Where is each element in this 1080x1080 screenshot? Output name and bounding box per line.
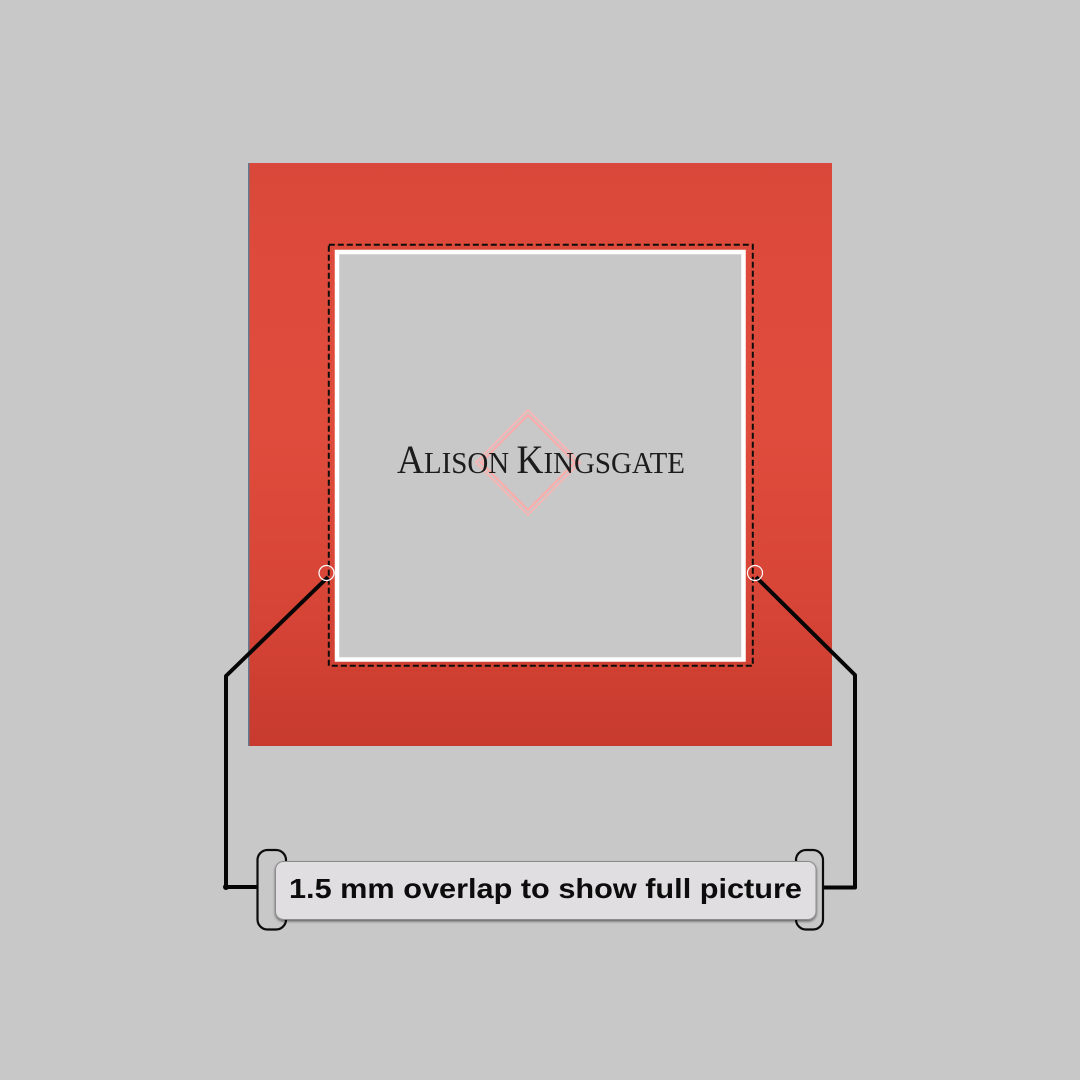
dashed overlap outline [329,245,753,666]
picture window with white border [337,252,744,660]
right marker circle [748,566,762,580]
left marker circle [319,566,334,580]
logo: wordmark: ALISON KINGSGATE [397,437,685,482]
right leader line [756,577,855,888]
callout label: 1.5 mm overlap to show full picture [289,873,802,904]
left leader line [223,577,328,890]
logo: pink diamond [476,410,580,515]
panel: red mat frame [248,163,832,746]
left bracket tab [258,850,286,930]
callout label [276,862,816,920]
right bracket tab [796,850,823,930]
